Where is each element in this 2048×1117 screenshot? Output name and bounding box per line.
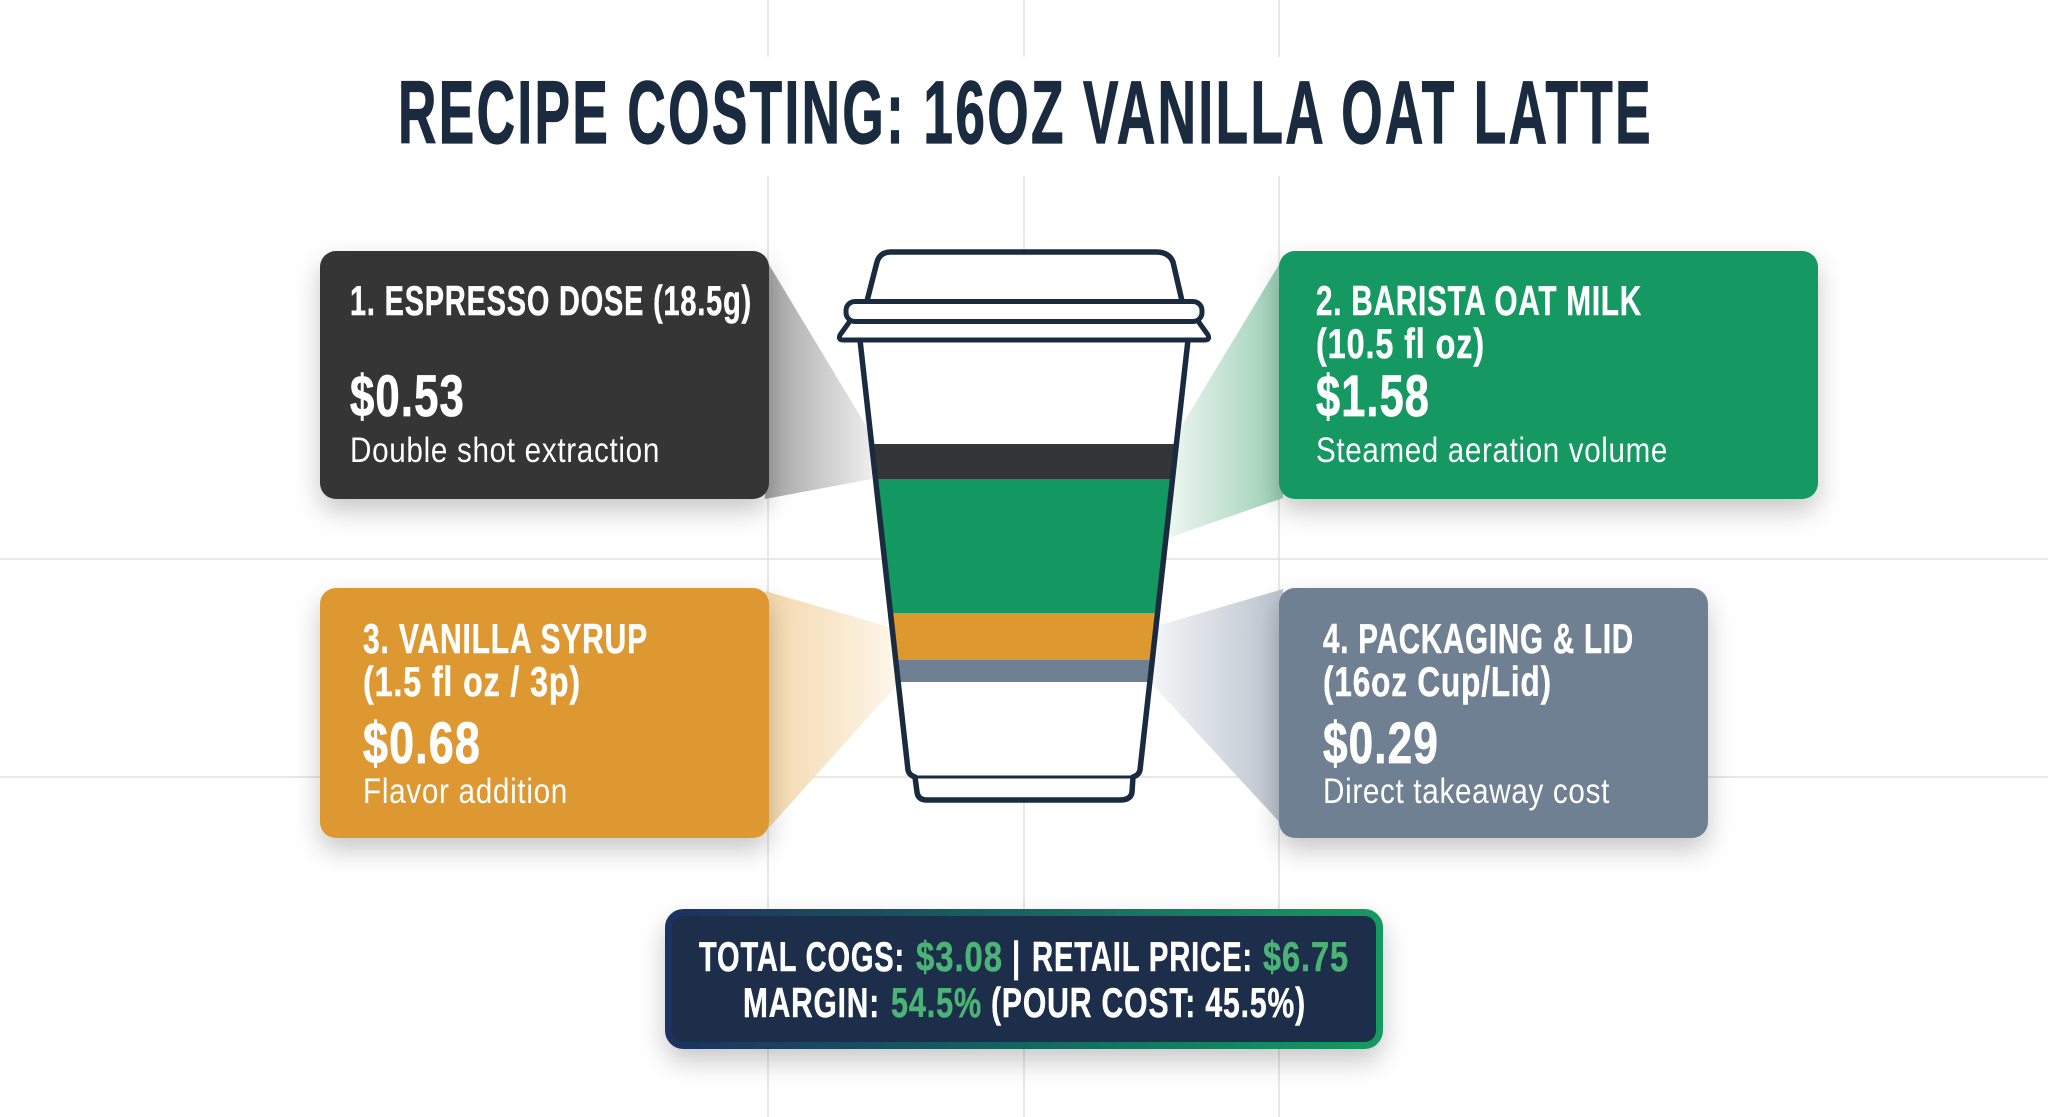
heading line 2: (1.5 fl oz / 3p) <box>363 658 581 705</box>
band: packaging <box>895 660 1152 682</box>
margin label: MARGIN: <box>743 979 880 1026</box>
cup body fill <box>860 340 1188 800</box>
card background <box>1279 251 1818 499</box>
heading line 2: (16oz Cup/Lid) <box>1323 658 1552 705</box>
band: vanilla syrup <box>890 613 1158 660</box>
heading line 1: 4. PACKAGING & LID <box>1323 615 1634 662</box>
summary background <box>668 912 1380 1046</box>
separator: | <box>1012 933 1021 981</box>
heading: 1. ESPRESSO DOSE (18.5g) <box>350 277 752 324</box>
cup outline <box>860 340 1188 800</box>
cup lid <box>867 252 1182 301</box>
panel: barista oat milk <box>1279 251 1818 499</box>
description: Direct takeaway cost <box>1323 772 1610 811</box>
pour cost: (POUR COST: 45.5%) <box>991 979 1306 1026</box>
lid rim upper <box>846 302 1202 322</box>
lid rim lower <box>839 321 1209 340</box>
heading line 2: (10.5 fl oz) <box>1316 320 1485 367</box>
connector: oat milk wedge <box>1168 258 1283 538</box>
heading line 1: 3. VANILLA SYRUP <box>363 615 648 662</box>
card background <box>320 588 769 838</box>
heading line 1: 2. BARISTA OAT MILK <box>1316 277 1642 324</box>
icon: takeaway cup <box>839 252 1209 800</box>
price: $0.29 <box>1323 711 1439 776</box>
total cogs value: $3.08 <box>916 933 1003 980</box>
panel: vanilla syrup <box>320 588 769 838</box>
connector: vanilla wedge <box>765 591 897 832</box>
margin value: 54.5% <box>891 979 982 1026</box>
card background <box>1279 588 1708 838</box>
connector: packaging wedge <box>1153 589 1283 826</box>
price: $0.53 <box>350 364 465 429</box>
panel: espresso dose <box>320 251 769 499</box>
cup base line <box>915 776 1133 778</box>
panel: packaging and lid <box>1279 588 1708 838</box>
connector: espresso wedge <box>765 258 872 499</box>
description: Steamed aeration volume <box>1316 431 1668 470</box>
description: Double shot extraction <box>350 431 660 470</box>
price: $1.58 <box>1316 364 1430 429</box>
description: Flavor addition <box>363 772 568 811</box>
retail price label: RETAIL PRICE: <box>1032 933 1253 980</box>
band: espresso <box>871 444 1176 479</box>
retail price value: $6.75 <box>1263 933 1349 980</box>
card background <box>320 251 769 499</box>
band: oat milk <box>875 479 1173 613</box>
price: $0.68 <box>363 711 481 776</box>
panel: totals summary <box>668 912 1380 1046</box>
total cogs label: TOTAL COGS: <box>699 933 905 980</box>
